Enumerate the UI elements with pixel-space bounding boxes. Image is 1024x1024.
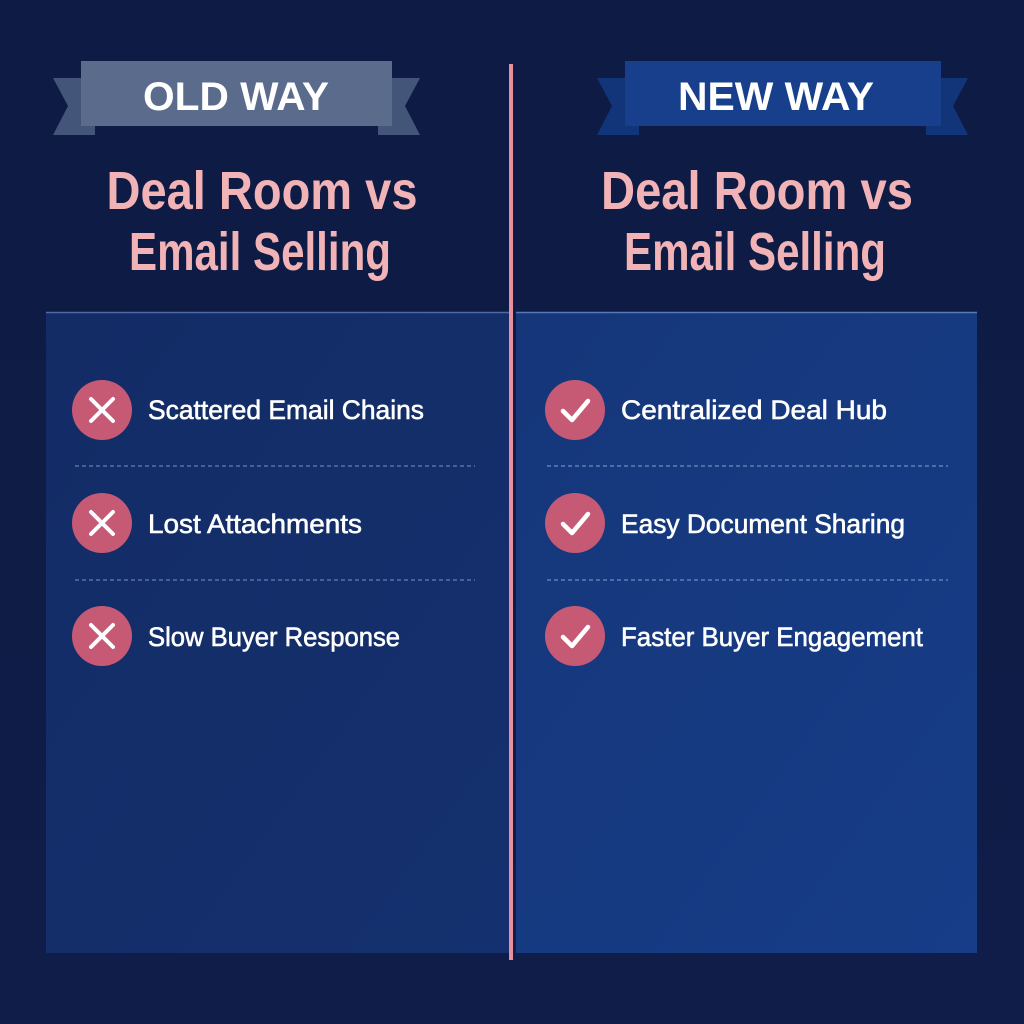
item: scattered email chains [72,380,424,440]
item: lost attachments [72,493,362,553]
title: left: Deal Room vs [106,161,418,221]
title: right: Deal Room vs [601,161,913,221]
panel: new way [516,312,977,953]
item: scattered email chains: Scattered Email Chains [148,395,424,425]
item: faster buyer engagement: Faster Buyer Engagement [621,622,923,652]
panel: old way [46,312,511,953]
title: left: Email Selling [129,222,391,282]
item: easy document sharing: Easy Document Sharing [621,509,905,539]
item: faster buyer engagement [545,606,923,666]
item: slow buyer response [72,606,400,666]
ribbon: new way [597,61,968,135]
ribbon: old way: OLD WAY [143,75,329,119]
ribbon: old way [53,61,420,135]
title: right [601,161,913,282]
divider line [509,64,513,960]
item: slow buyer response: Slow Buyer Response [148,622,400,652]
ribbon: new way: NEW WAY [678,75,874,119]
item: centralized deal hub [545,380,887,440]
item: lost attachments: Lost Attachments [148,509,362,539]
title: right: Email Selling [624,222,886,282]
item: centralized deal hub: Centralized Deal Hub [621,395,887,425]
item: easy document sharing [545,493,905,553]
title: left [106,161,418,282]
